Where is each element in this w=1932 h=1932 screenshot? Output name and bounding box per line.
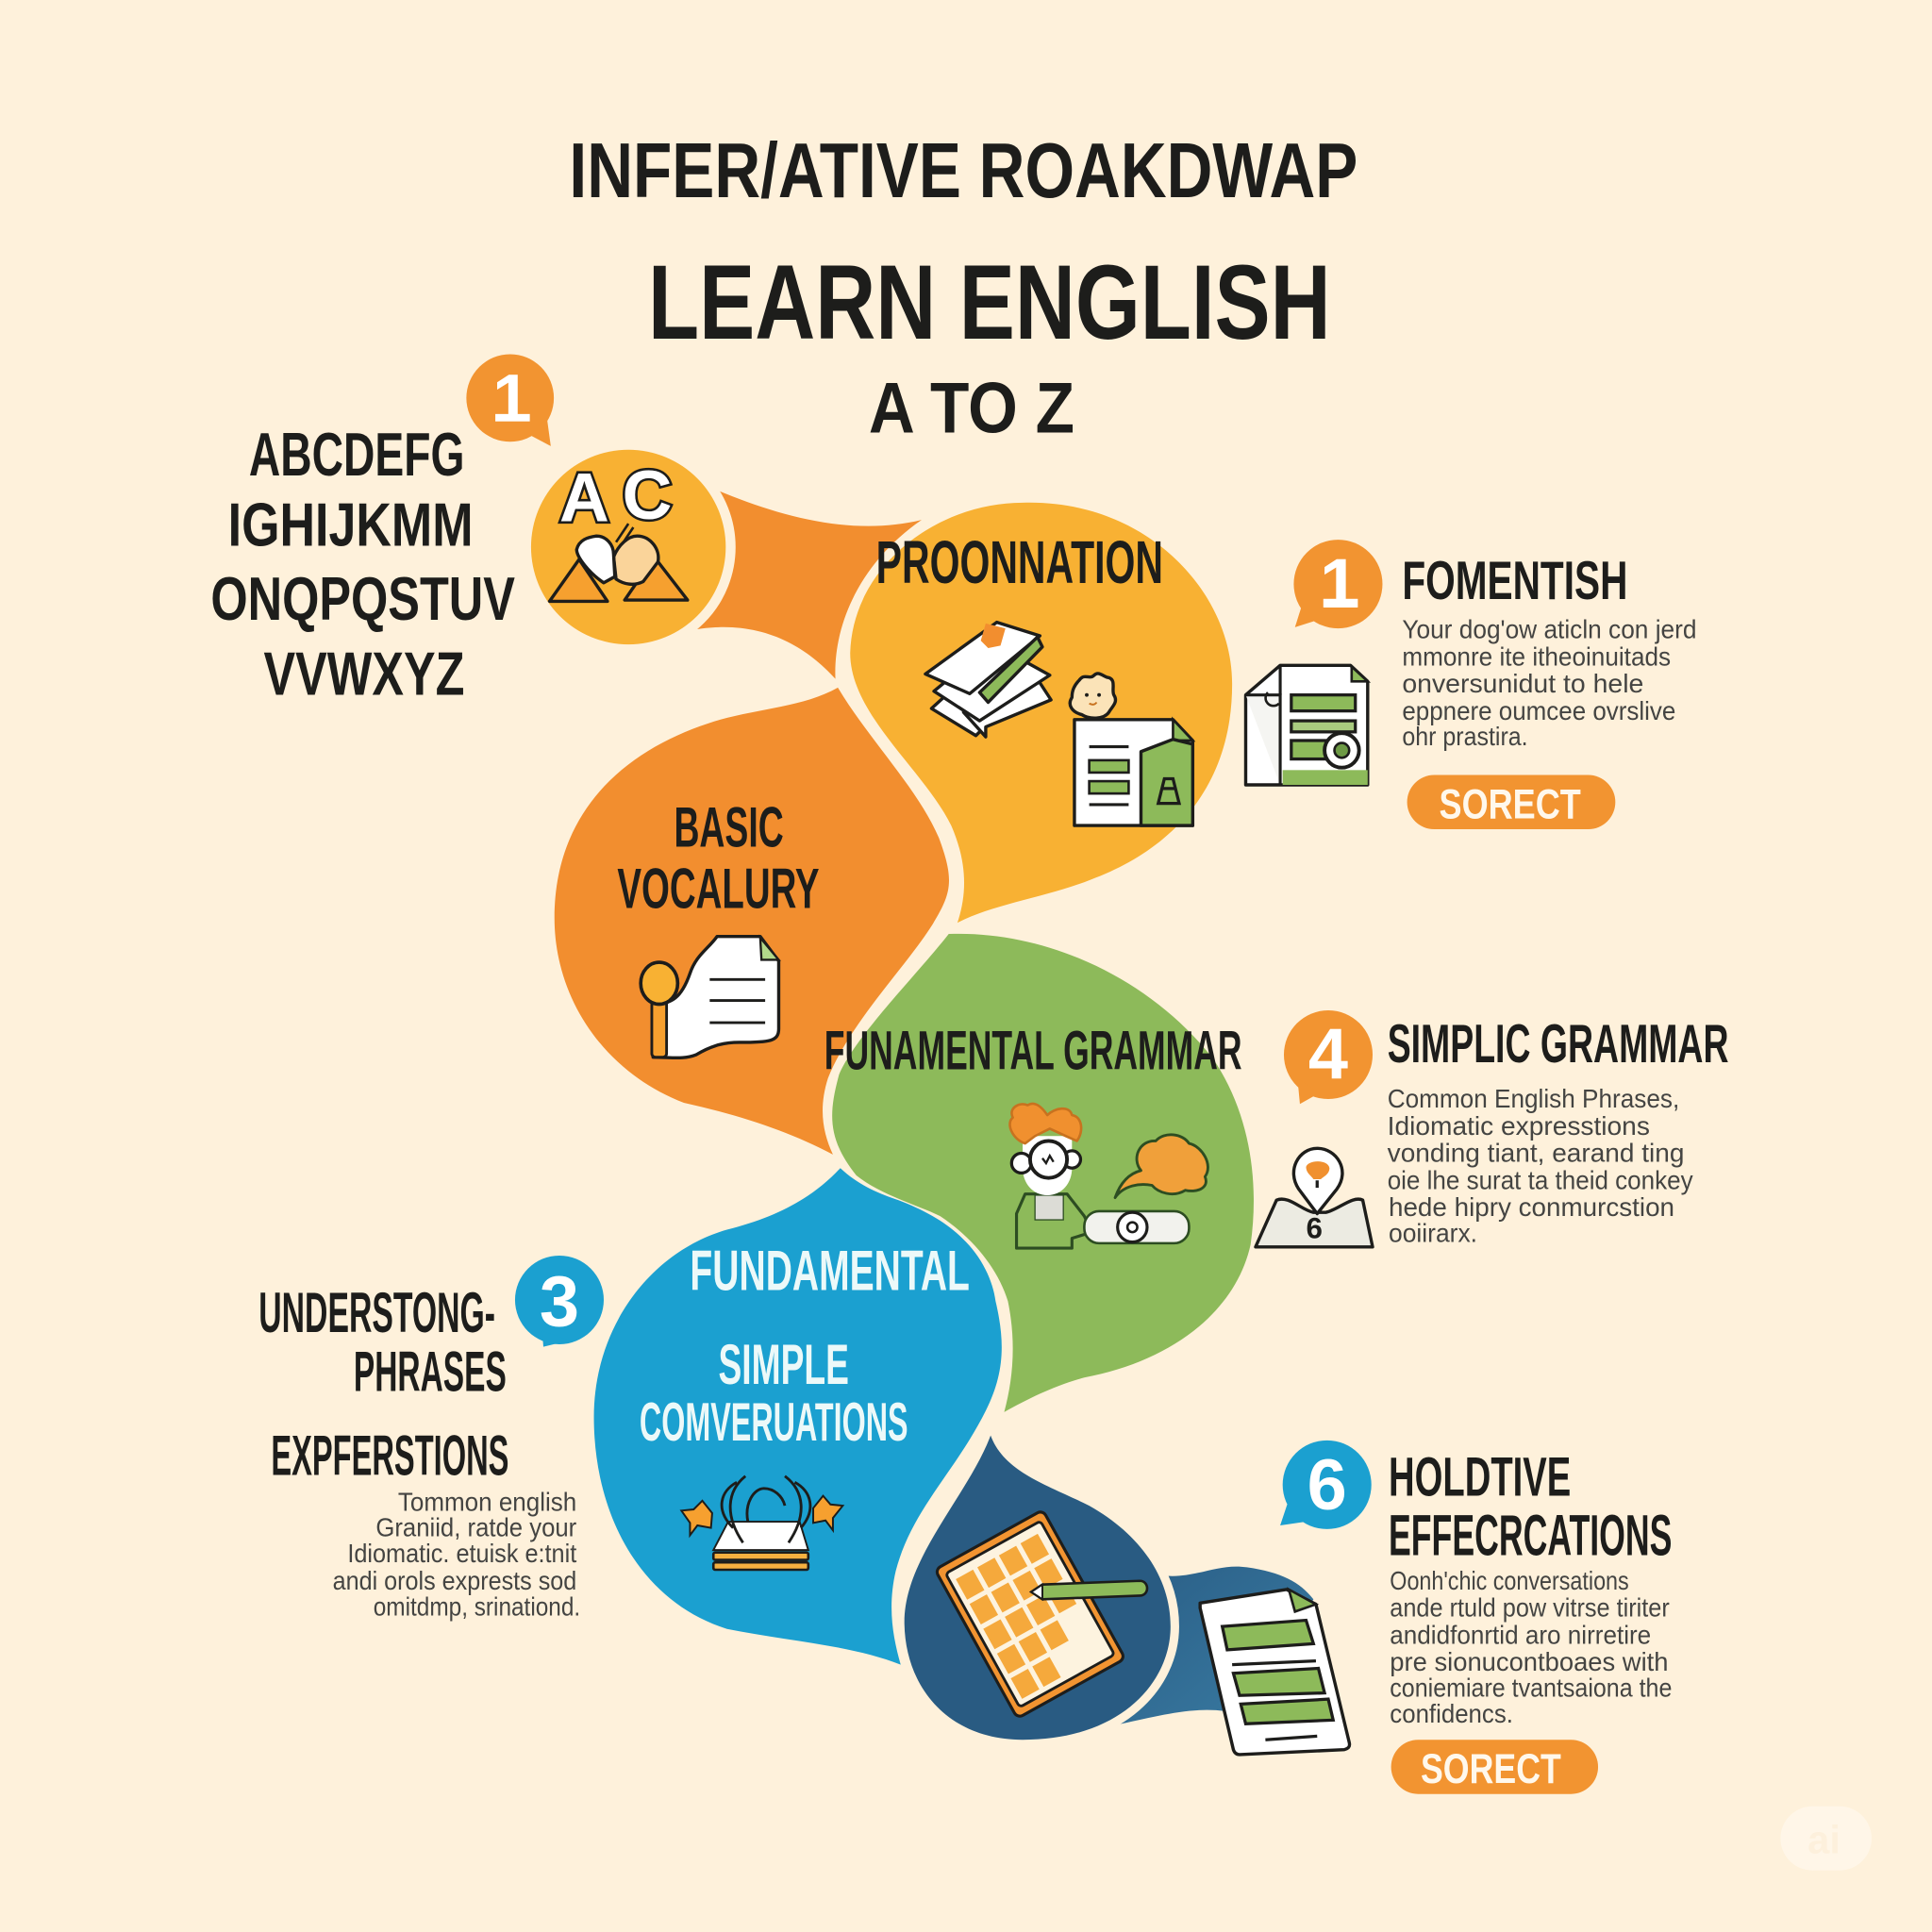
blob: basic vocabulary bbox=[555, 688, 949, 1155]
body copy bbox=[1388, 1084, 1693, 1248]
connector: alphabet to pronunciation bbox=[681, 490, 922, 679]
badge: step 6: 6 bbox=[1307, 1445, 1347, 1525]
icon: person with projector bbox=[1010, 1104, 1208, 1248]
body copy bbox=[1402, 615, 1697, 751]
heading: pronunciation: PROONNATION bbox=[876, 528, 1163, 596]
body copy: ohr prastira. bbox=[1402, 722, 1528, 751]
icon: conversation stack bbox=[681, 1476, 842, 1570]
body copy: pre sionucontboaes with bbox=[1390, 1647, 1668, 1676]
heading: fundamental grammar: FUNAMENTAL GRAMMAR bbox=[824, 1021, 1242, 1082]
heading: understong phrases bbox=[258, 1281, 508, 1487]
body copy: hede hipry conmurcstion bbox=[1389, 1192, 1674, 1222]
title line: roadmap: INFER/ATIVE ROAKDWAP bbox=[569, 128, 1357, 214]
heading: basic vocabulary: VOCALURY bbox=[617, 858, 820, 921]
blob: holistic bbox=[905, 1436, 1171, 1740]
body copy: confidencs. bbox=[1390, 1699, 1513, 1728]
title line: a to z: A TO Z bbox=[869, 368, 1074, 448]
badge: step 3 bbox=[515, 1256, 604, 1347]
text: alphabet: ABCDEFG bbox=[249, 420, 464, 489]
heading: fundamental: FUNDAMENTAL bbox=[690, 1240, 970, 1303]
text block: pronunciation details bbox=[1402, 551, 1697, 829]
body copy: omitdmp, srinationd. bbox=[374, 1591, 580, 1621]
roadmap path bbox=[531, 450, 1313, 1740]
heading: simple conversations: COMVERUATIONS bbox=[640, 1392, 908, 1453]
body copy: oie lhe surat ta theid conkey bbox=[1388, 1165, 1693, 1194]
body copy: Idiomatic. etuisk e:tnit bbox=[347, 1539, 577, 1568]
icon: alphabet letters bbox=[550, 458, 688, 601]
blob: dark blue connector bbox=[1115, 1567, 1313, 1725]
blob: pronunciation bbox=[850, 503, 1232, 923]
body copy: Tommon english bbox=[398, 1487, 576, 1516]
text: alphabet: VVWXYZ bbox=[264, 640, 464, 708]
button: SORECT bbox=[1440, 781, 1581, 827]
body copy: Common English Phrases, bbox=[1388, 1084, 1679, 1113]
heading: simple conversations bbox=[640, 1333, 908, 1453]
blob: fundamental grammar bbox=[832, 934, 1254, 1412]
heading: holdtive effercations: HOLDTIVE bbox=[1389, 1447, 1571, 1508]
body copy: Graniid, ratde your bbox=[375, 1513, 576, 1542]
body copy: onversunidut to hele bbox=[1402, 669, 1643, 698]
badge: step 4: 4 bbox=[1308, 1014, 1348, 1094]
icon: green document bbox=[1245, 665, 1368, 785]
watermark: ai bbox=[1807, 1817, 1840, 1861]
body copy bbox=[333, 1487, 580, 1621]
heading: understong phrases: EXPFERSTIONS bbox=[271, 1424, 508, 1487]
badge: step 6 bbox=[1280, 1441, 1372, 1529]
heading: understong phrases: PHRASES bbox=[354, 1341, 507, 1404]
icon: document with green bars bbox=[1200, 1590, 1350, 1755]
heading: basic vocabulary: BASIC bbox=[674, 795, 784, 858]
heading: understong phrases: UNDERSTONG- bbox=[258, 1281, 495, 1344]
title bbox=[569, 128, 1357, 448]
title line: learn english: LEARN ENGLISH bbox=[648, 242, 1331, 361]
body copy: coniemiare tvantsaiona the bbox=[1390, 1674, 1672, 1703]
body copy: Oonh'chic conversations bbox=[1390, 1566, 1629, 1595]
badge: step 4 bbox=[1284, 1010, 1373, 1104]
icon: paper stack bbox=[925, 623, 1051, 737]
body copy bbox=[1390, 1566, 1672, 1728]
heading: simple conversations: SIMPLE bbox=[718, 1333, 849, 1396]
badge: step 1 pronunciation: 1 bbox=[1320, 544, 1358, 623]
button: SORECT bbox=[1421, 1746, 1561, 1792]
text: alphabet: IGHIJKMM bbox=[228, 491, 474, 559]
body copy: Idiomatic expresstions bbox=[1388, 1111, 1650, 1141]
text block: simple grammar bbox=[1388, 1014, 1728, 1248]
body copy: mmonre ite itheoinuitads bbox=[1402, 641, 1671, 671]
icon: document with pin bbox=[641, 937, 778, 1058]
body copy: Your dog'ow aticln con jerd bbox=[1402, 615, 1697, 644]
circle: alphabet bbox=[531, 450, 725, 644]
badge: step 3: 3 bbox=[540, 1261, 579, 1341]
body copy: vonding tiant, earand ting bbox=[1388, 1139, 1684, 1168]
badge: step 1 alphabet: 1 bbox=[492, 361, 530, 437]
watermark bbox=[1780, 1807, 1872, 1871]
icon: alphabet letters: A bbox=[559, 459, 609, 536]
badge: step 1 alphabet bbox=[466, 355, 554, 446]
text block: understanding phrases bbox=[258, 1281, 580, 1621]
heading: holdtive effercations bbox=[1389, 1447, 1672, 1568]
icon: map pin: 6 bbox=[1306, 1212, 1323, 1245]
body copy: eppnere oumcee ovrslive bbox=[1402, 696, 1675, 725]
text block: holistic effects bbox=[1389, 1447, 1672, 1794]
body copy: andi orols exprests sod bbox=[333, 1566, 576, 1595]
heading: simplic grammar: SIMPLIC GRAMMAR bbox=[1388, 1014, 1728, 1074]
heading: fomentish: FOMENTISH bbox=[1402, 551, 1627, 611]
badge: step 1 pronunciation bbox=[1293, 540, 1382, 628]
heading: basic vocabulary bbox=[617, 795, 820, 921]
icon: alphabet letters: C bbox=[623, 458, 672, 534]
body copy: ooiirarx. bbox=[1389, 1219, 1477, 1248]
text: alphabet bbox=[210, 420, 515, 708]
icon: document with mascot bbox=[1070, 674, 1192, 825]
icon: tablet with pencil bbox=[935, 1510, 1147, 1719]
text: alphabet: ONQPQSTUV bbox=[210, 564, 515, 633]
icon: map pin bbox=[1256, 1148, 1373, 1247]
body copy: ande rtuld pow vitrse tiriter bbox=[1390, 1593, 1670, 1623]
heading: holdtive effercations: EFFECRCATIONS bbox=[1389, 1503, 1672, 1568]
body copy: andidfonrtid aro nirretire bbox=[1390, 1620, 1651, 1649]
blob: simple conversations bbox=[594, 1168, 1002, 1665]
